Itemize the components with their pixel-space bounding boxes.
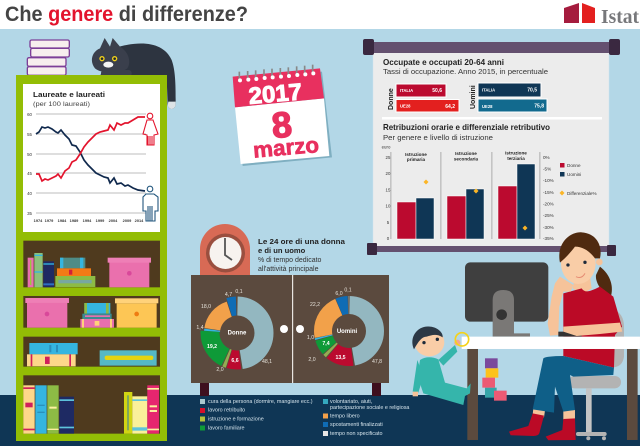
bar chart: hourly pay: -25% [543,213,554,218]
legend: time use: partecipazione sociale e religiosa [330,405,409,411]
bar chart: hourly pay: 25 [386,155,391,160]
panel: projection screen [363,39,620,256]
labels: women: 6,6 [231,358,239,364]
labels: women: 18,0 [201,304,211,310]
y axis labels: 45 [27,171,33,176]
icon: woman [143,113,158,145]
x axis labels: 2004 [109,218,118,223]
bar chart: hourly pay: -5% [543,166,551,172]
calendar text: marzo [252,132,320,163]
box: pink [108,258,151,287]
legend: time use: lavoro familiare [208,426,245,432]
books: shelf 4 left [23,385,74,434]
box: teal [100,350,157,366]
y axis labels: 50 [27,152,33,157]
legend: time use: tempo libero [330,414,360,420]
legend: time use: tempo non specificato [330,431,382,437]
x axis labels: 1984 [58,218,67,223]
icon: desk [462,337,640,440]
labels: women: 19,2 [207,344,217,350]
icon: cat [92,38,176,109]
bar chart: hourly pay: Istruzione [405,152,427,157]
bar chart: hourly pay [382,144,554,241]
bar chart: hourly pay: 20 [386,171,391,176]
bar chart: women employment: Donne [388,88,395,110]
bar chart: hourly pay: 15 [386,188,391,192]
y axis labels: 55 [27,132,33,137]
x axis labels: 1989 [70,218,79,223]
labels: men: 0,1 [344,288,352,294]
legend: pay chart: Differenziale% [567,191,597,196]
chart subheading: (per 100 laureati) [33,101,90,108]
bar chart: hourly pay: 0% [543,155,550,160]
bar chart: women employment: UE28 [400,104,411,108]
x axis labels: 1974 [34,218,43,223]
bar chart: hourly pay: Istruzione [505,150,527,156]
bar chart: women employment: 64,2 [445,104,455,110]
bar chart: hourly pay: 0 [387,236,390,241]
labels: women [196,289,272,373]
x axis labels: 2009 [123,218,132,223]
chart heading: Laureate e laureati [33,90,105,99]
time use subheading: % di tempo dedicato [258,257,321,264]
labels: women: Donne [228,330,247,336]
bar chart: men employment [470,83,547,112]
labels: men: 47,8 [372,359,382,365]
legend: pay chart [560,163,597,196]
calendar: 8 marzo 2017 [233,65,332,166]
figure: child [412,326,471,405]
labels: men: 6,0 [335,291,343,297]
books: shelf 3 [27,343,78,366]
y axis labels: 40 [27,191,33,196]
labels: women: 2,0 [216,367,224,373]
x axis labels: 1979 [45,218,54,223]
time use heading: Le 24 ore di una donna [258,237,346,246]
labels: women: 1,4 [196,325,204,331]
bar chart: hourly pay: euro [382,144,391,150]
pay subheading: Per genere e livello di istruzione [383,133,493,142]
icon: monitor [465,262,548,337]
bar chart: men employment: UE28 [482,104,493,109]
x axis labels [34,218,144,223]
calendar text: 2017 [248,78,303,109]
box: yellow [115,298,158,328]
x axis labels: 1994 [83,218,92,223]
labels: men [307,288,382,365]
bar chart: men employment: 75,8 [534,104,544,110]
legend: time use: istruzione e formazione [208,416,264,422]
bar chart: men employment: Uomini [470,85,477,109]
x axis labels: 1999 [96,218,105,223]
logo: Istat [564,3,639,28]
bar chart: men employment: ITALIA [482,88,495,92]
bar chart: hourly pay: -35% [543,236,554,241]
books: shelf 4 right [124,385,159,434]
panel: cabinet with donut charts [191,275,389,396]
legend: time use: cura della persona (dormire, mangiare ecc.) [208,399,313,405]
icon: toy blocks [482,358,507,401]
donut: men [307,288,382,365]
bar chart: women employment: ITALIA [400,88,413,93]
labels: women: 4,7 [225,292,232,298]
illustration: desk, mother and child [412,232,640,440]
bar chart: women employment [388,84,459,112]
donut: women [196,289,272,373]
icon: wall clock [200,224,250,275]
legend: time use: spostamenti finalizzati [330,422,383,428]
bar chart: hourly pay: -20% [543,202,554,206]
logo: Istat: Istat [601,6,639,28]
time use heading: e di un uomo [258,246,306,255]
shelves and contents [23,241,160,434]
line: women [36,117,145,181]
bar chart: hourly pay: primaria [407,157,426,162]
employment heading: Occupate e occupati 20-64 anni [383,58,504,67]
y axis labels [27,112,33,216]
bar chart: hourly pay: terziaria [507,156,525,161]
bar chart: women employment: 50,6 [432,88,442,94]
bar chart: men employment: 70,5 [527,88,537,94]
bar chart: hourly pay: secondaria [454,156,479,162]
y axis labels: 60 [27,112,33,117]
bar chart: hourly pay: 5 [387,220,390,225]
figure: mother [509,232,622,440]
labels: men: 13,5 [335,355,346,361]
icon: man [143,186,158,221]
box: pink shelf 2 [25,298,69,328]
employment subheading: Tassi di occupazione. Anno 2015, in percentuale [383,67,548,76]
y axis labels: 35 [27,211,33,216]
books: shelf 2 [80,303,114,328]
calendar text: 8 [270,103,293,146]
legend: time use [200,399,409,437]
labels: women: 48,1 [262,359,272,365]
bookcase [16,75,167,441]
books: shelf 1 [28,253,95,287]
bar chart: hourly pay: -30% [543,225,554,230]
bar chart: hourly pay: -15% [543,190,554,195]
bar chart: hourly pay: 10 [386,204,391,208]
calendar text [247,77,320,163]
time use subheading: all'attività principale [258,266,319,273]
labels: men: 22,2 [310,302,320,308]
legend: pay chart: Donne [567,163,581,168]
labels: men: Uomini [337,329,357,335]
labels: men: 7,4 [322,341,330,347]
icon: stack of books [27,40,69,75]
bar chart: hourly pay: Istruzione [455,151,477,156]
legend: time use: lavoro retribuito [208,408,245,414]
legend: pay chart: Uomini [567,172,581,177]
icon: chair [568,309,624,440]
line: men [36,127,145,191]
x axis labels: 2014 [135,218,144,223]
header band [0,0,640,29]
title: Che genere di differenze? [5,3,248,26]
pay heading: Retribuzioni orarie e differenziale retributivo [383,123,550,132]
floor [0,395,640,446]
labels: women: 0,1 [235,289,243,295]
labels: men: 1,0 [307,335,314,341]
legend: time use: volontariato, aiuti, [330,399,373,405]
labels: men: 2,0 [308,357,316,363]
bar chart: hourly pay: -10% [543,178,554,183]
panel: line chart [23,84,160,232]
